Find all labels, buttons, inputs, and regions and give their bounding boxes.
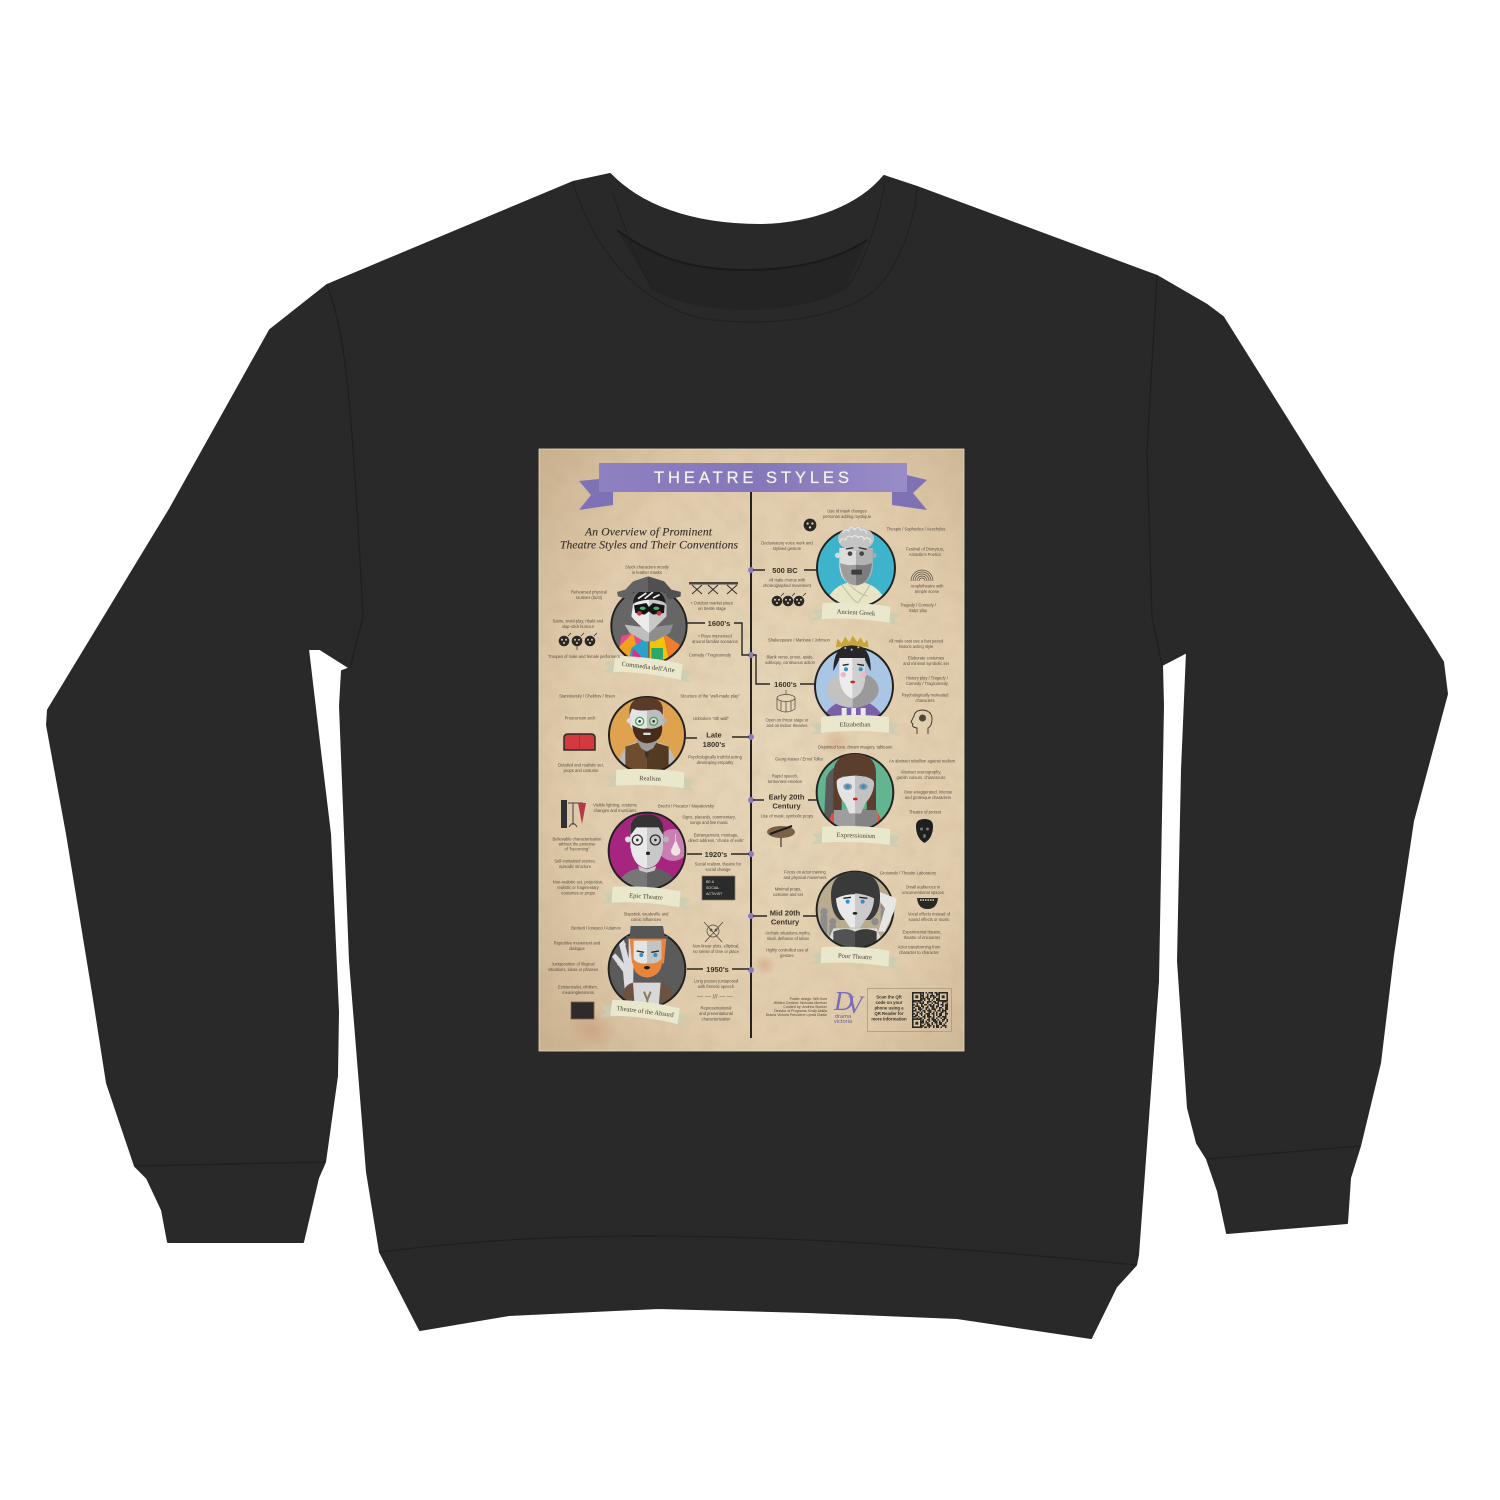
text: juxtaposition: situations, ideas or phrases bbox=[548, 967, 598, 972]
text: estrangement: direct address, 'choice of evils' bbox=[688, 838, 744, 843]
title banner: THEATRE STYLES bbox=[654, 469, 849, 487]
text: comedy: Comedy / Tragicomedy bbox=[689, 652, 732, 658]
icon: globe theatre bbox=[777, 690, 795, 712]
text: festival of dionysus: Aristotle's Poetics bbox=[909, 552, 941, 557]
text: slapstick: comic influences bbox=[631, 917, 661, 922]
connector and date: 1600's left: 1600's bbox=[708, 619, 730, 628]
text: actor transforming: character to character bbox=[899, 950, 940, 955]
icon: chalkboard: SOCIAL bbox=[706, 886, 719, 890]
text: blank verse: soliloquy, continuous action bbox=[765, 660, 816, 665]
text: non-realistic set: costumes or props bbox=[561, 890, 595, 896]
text: festival of dionysus: Festival of Dionysus, bbox=[906, 546, 944, 552]
text: elaborate costumes: Elaborate costumes bbox=[908, 656, 944, 660]
text: open thrust stage: and on indoor theatres bbox=[767, 723, 807, 728]
text: estrangement: Estrangement, montage, bbox=[694, 832, 738, 838]
ribbon: commedia dell'arte: Commedia dell'Arte bbox=[621, 661, 675, 674]
text: outdoor market: • Outdoor market place bbox=[691, 600, 734, 606]
text: over-exaggerated: and grotesque characters bbox=[905, 795, 951, 800]
text: small audiences: Small audiences in bbox=[906, 884, 941, 890]
text: tragedy: Satyr play bbox=[909, 608, 928, 613]
text: non-realistic set: Non-realistic set, projection, bbox=[553, 880, 603, 884]
logo: drama victoria: victoria bbox=[834, 1019, 853, 1025]
text: detailed set: Detailed and realistic set, bbox=[558, 762, 604, 768]
text: abstract scenography: Abstract scenography, bbox=[901, 770, 941, 774]
text: self-contained scenes: Self-contained scenes, bbox=[554, 858, 596, 864]
credits: Poster design: Will Hunt bbox=[790, 997, 827, 1001]
text: repetitive movement: dialogue bbox=[569, 946, 585, 951]
connector and date: early 20th century bbox=[753, 792, 817, 810]
panel: poor theatre bbox=[753, 870, 951, 969]
text: highly controlled gesture: Highly controlled use of bbox=[766, 948, 809, 952]
text: shakespeare: Shakespeare / Marlowe / Johnson bbox=[768, 638, 831, 642]
text: history play: Comedy / Tragicomedy bbox=[906, 681, 949, 686]
connector and date: mid 20th century: Mid 20th bbox=[770, 908, 801, 918]
text: male chorus: All male chorus with bbox=[769, 578, 806, 582]
text: signs and placards: Signs, placards, commentary, bbox=[682, 814, 736, 820]
icon: chalkboard: BE A bbox=[706, 880, 715, 884]
text: repetitive movement: Repetitive movement and bbox=[554, 940, 601, 946]
text: declamatory voice: stylised gesture bbox=[773, 546, 802, 551]
icon: mouth bbox=[917, 898, 938, 909]
text: rehearsed routines: Rehearsed physical bbox=[571, 590, 607, 594]
text: highly controlled gesture: gesture bbox=[780, 953, 795, 958]
qr code bbox=[912, 993, 948, 1027]
ribbon: realism: Realism bbox=[639, 775, 662, 783]
ribbon: commedia dell'arte bbox=[602, 653, 694, 683]
connector and date: late 1800's: Late bbox=[706, 730, 722, 740]
text: open thrust stage: Open on thrust stage or bbox=[765, 718, 809, 722]
text: rapid speech: tormented emotion bbox=[768, 779, 803, 784]
ribbon: elizabethan bbox=[810, 715, 900, 735]
text: amphitheatre: Amphitheatre with bbox=[911, 584, 944, 588]
icon: chalkboard: ACTIVIST bbox=[706, 892, 723, 896]
text: plays improvised: around familiar scenarios bbox=[692, 639, 738, 644]
text: believable characterisation: without the pretense bbox=[559, 842, 596, 846]
icon: greek mask bbox=[804, 519, 816, 531]
text: all male cast: All male cast use a fast paced bbox=[889, 638, 944, 644]
credits: Director of Programs: Emily Akkila bbox=[774, 1009, 827, 1013]
title banner bbox=[579, 463, 927, 510]
text: outdoor market: on trestle stage bbox=[698, 606, 727, 611]
text: scan the qr code: Scan the QR bbox=[876, 994, 903, 1000]
panel: elizabethan bbox=[753, 636, 950, 735]
text: satire: slap-stick humour bbox=[562, 624, 595, 629]
credits: Drama Victoria President: Lynda Clarke bbox=[766, 1013, 827, 1017]
text: satire: Satire, word-play, ribald and bbox=[553, 618, 604, 624]
text: experimental theatre: theatre of encounter bbox=[904, 935, 941, 940]
text: plays improvised: • Plays improvised bbox=[698, 634, 732, 638]
connector and date: 500 BC: 500 BC bbox=[772, 566, 798, 575]
connector and date: late 1800's bbox=[686, 730, 749, 749]
text: mask changes: Use of mask changes bbox=[827, 508, 867, 514]
text: history play: History play / Tragedy / bbox=[906, 676, 949, 680]
text: long pauses: with frenetic speech bbox=[698, 984, 735, 989]
ribbon: theatre of the absurd bbox=[599, 997, 691, 1027]
connector and date: 1600's right bbox=[753, 655, 815, 689]
text: long pauses: Long pauses juxtaposed bbox=[694, 978, 739, 984]
text: blank verse: Blank verse, prose, aside, bbox=[766, 654, 814, 660]
connector and date: 500 BC bbox=[753, 566, 817, 575]
panel: expressionism bbox=[753, 744, 956, 848]
text: stock characters: Stock characters mostly bbox=[625, 564, 670, 570]
portrait: realism bbox=[609, 697, 685, 777]
text: abstract rebellion: An abstract rebellion against realism bbox=[889, 758, 956, 764]
icon: male and female masks bbox=[559, 633, 597, 650]
text: juxtaposition: Juxtaposition of illogical bbox=[551, 962, 595, 966]
text: archaic situations: ritual, defiance of taboo bbox=[767, 936, 810, 941]
ribbon: expressionism bbox=[811, 824, 901, 848]
text: minimal props: costume and set bbox=[773, 892, 804, 897]
text: visible lighting: Visible lighting, costume bbox=[593, 802, 638, 808]
text: representational: characterisation bbox=[702, 1016, 731, 1022]
connector and date: early 20th century: Early 20th bbox=[769, 792, 805, 802]
ribbon: theatre of the absurd: Theatre of the Absurd bbox=[616, 1005, 675, 1019]
text: abstract scenography: garish colours, chiaroscuro bbox=[897, 775, 946, 780]
ribbon: ancient greek bbox=[811, 601, 901, 625]
text: believable characterisation: Believable characterisation bbox=[553, 836, 602, 842]
credits: Curated by: Andrew Stocker bbox=[783, 1005, 828, 1009]
icon: amphitheatre bbox=[911, 570, 933, 581]
text: declamatory voice: Declamatory voice work and bbox=[761, 540, 813, 546]
text: well-made play: Structure of the "well-made play" bbox=[680, 694, 740, 698]
ribbon: epic theatre bbox=[600, 884, 692, 910]
icon: proscenium curtain bbox=[564, 734, 595, 750]
text: scan the qr code: phone using a bbox=[874, 1006, 904, 1010]
text: non-linear plots: Non-linear plots, elliptical, bbox=[693, 944, 739, 948]
text: signs and placards: songs and live music bbox=[690, 820, 728, 825]
text: georg kaiser: Georg Kaiser / Ernst Toller bbox=[775, 756, 824, 762]
text: amphitheatre: temple scene bbox=[915, 589, 940, 594]
text: small audiences: unconventional spaces bbox=[902, 890, 944, 895]
text: over-exaggerated: Over-exaggerated, intense bbox=[904, 790, 953, 794]
icon: props and lighting bbox=[561, 800, 586, 828]
ribbon: epic theatre: Epic Theatre bbox=[629, 892, 663, 902]
connector and date: early 20th century: Century bbox=[772, 802, 801, 810]
text: proscenium arch: Proscenium arch bbox=[565, 716, 596, 720]
logo: drama victoria: V bbox=[847, 992, 865, 1019]
qr callout bbox=[868, 988, 952, 1032]
text: rapid speech: Rapid speech, bbox=[772, 774, 798, 778]
text: existentialist: Existentialist, nihilism, bbox=[558, 984, 598, 990]
icon: crossed mask bbox=[704, 922, 723, 942]
text: beckett: Beckett / Ionesco / Adamov bbox=[571, 926, 622, 930]
panel: epic theatre bbox=[553, 800, 749, 910]
icon: black mask bbox=[916, 819, 933, 843]
text: brecht: Brecht / Piscator / Mayakovsky bbox=[658, 804, 715, 808]
text: all male cast: historic acting style bbox=[899, 644, 934, 649]
icon: three lines: — — III — — bbox=[696, 994, 734, 1000]
text: theatre of protest: Theatre of protest bbox=[909, 810, 942, 814]
ribbon: poor theatre: Poor Theatre bbox=[838, 953, 872, 961]
subtitle: An Overview of Prominent bbox=[584, 526, 713, 538]
text: archaic situations: Archaic situations,myths, bbox=[765, 930, 811, 936]
text: grotowski: Grotowski / Theatre Laboratory bbox=[880, 870, 937, 876]
panel: theatre of the absurd bbox=[548, 912, 749, 1027]
text: social realism: social change bbox=[705, 867, 731, 872]
ribbon: realism bbox=[605, 767, 695, 791]
icon: symbolic prop bbox=[767, 826, 795, 847]
text: elaborate costumes: and minimal symbolic set bbox=[903, 661, 950, 666]
connector and date: mid 20th century: Century bbox=[771, 918, 800, 926]
icon: trestle stage bbox=[689, 582, 738, 594]
connector and date: late 1800's: 1800's bbox=[703, 740, 725, 749]
text: focus on actor training: Focus on actor training bbox=[784, 870, 827, 874]
panel: realism bbox=[558, 694, 749, 791]
text: mask changes: personas adding mystique bbox=[823, 514, 872, 519]
timeline axis bbox=[748, 492, 754, 1038]
text: vocal effects: Vocal effects instead of bbox=[908, 912, 951, 916]
logo: drama victoria: D bbox=[833, 986, 854, 1016]
panel: ancient greek bbox=[753, 508, 945, 625]
credits: Written Content: Nicholas Meehan bbox=[774, 1001, 827, 1005]
poster: theatre styles bbox=[539, 449, 964, 1051]
panel: commedia dell'arte bbox=[548, 564, 749, 683]
sweatshirt bbox=[47, 174, 1447, 1338]
text: self-contained scenes: episodic structure bbox=[559, 864, 592, 869]
text: representational: Representational bbox=[701, 1006, 732, 1010]
connector and date: 1920's: 1920's bbox=[705, 850, 727, 859]
text: rehearsed routines: routines (lazzi) bbox=[576, 595, 603, 600]
text: scan the qr code: QR Reader for bbox=[874, 1011, 904, 1016]
text: existentialist: meaninglessness bbox=[562, 990, 594, 995]
text: psychologically truthful: Psychologically truthful acting bbox=[688, 754, 743, 760]
text: use of mask: Use of mask, symbolic props bbox=[761, 814, 813, 818]
connector and date: 1920's bbox=[687, 850, 749, 859]
text: stanislavsky: Stanislavsky / Chekhov / Ibsen bbox=[559, 694, 616, 698]
icon: chalkboard bbox=[702, 876, 735, 900]
ribbon: elizabethan: Elizabethan bbox=[839, 722, 871, 728]
text: psychologically motivated: Psychologically motivated bbox=[902, 692, 949, 698]
text: tragedy: Tragedy / Comedy / bbox=[900, 602, 937, 608]
portrait: commedia bbox=[611, 576, 687, 665]
text: non-realistic set: realistic or fragmentary bbox=[557, 885, 600, 890]
text: stock characters: in leather masks bbox=[632, 570, 662, 575]
logo: drama victoria: drama bbox=[835, 1014, 852, 1020]
connector and date: 1950's bbox=[687, 965, 749, 974]
portrait: elizabethan bbox=[815, 636, 893, 725]
subtitle: Theatre Styles and Their Conventions bbox=[560, 538, 738, 552]
text: male chorus: choreographed movement bbox=[763, 583, 812, 588]
text: troupes: Troupes of male and female performers bbox=[548, 654, 620, 659]
connector and date: mid 20th century bbox=[753, 908, 817, 926]
text: thespis: Thespis / Sophocles / Aeschylus bbox=[887, 526, 945, 532]
portrait: ancient greek bbox=[817, 527, 895, 608]
text: scan the qr code: code on your bbox=[876, 1000, 903, 1005]
ribbon: ancient greek: Ancient Greek bbox=[837, 608, 876, 618]
text: experimental theatre: Experimental theatre, bbox=[903, 930, 941, 934]
text: detailed set: props and costume bbox=[564, 768, 599, 773]
text: minimal props: Minimal props, bbox=[775, 886, 801, 892]
text: fourth wall: Unbroken "4th wall" bbox=[693, 716, 729, 721]
text: focus on actor training: and physical movement bbox=[783, 875, 827, 880]
text: social realism: Social realism, theatre for bbox=[695, 862, 742, 866]
text: non-linear plots: no sense of time or place bbox=[693, 949, 740, 954]
portrait: poor theatre bbox=[817, 872, 897, 952]
text: actor transforming: Actor transforming from bbox=[898, 944, 941, 950]
connector and date: 1600's right: 1600's bbox=[774, 680, 797, 689]
logo: drama victoria bbox=[833, 986, 865, 1025]
icon: blackboard bbox=[571, 1002, 594, 1019]
text: representational: and presentational bbox=[699, 1011, 733, 1016]
text: slapstick: Slapstick, vaudeville and bbox=[624, 912, 669, 916]
portrait: epic bbox=[609, 813, 689, 893]
text: scan the qr code: more information bbox=[871, 1016, 907, 1022]
paper background bbox=[539, 449, 964, 1051]
icon: chorus masks bbox=[772, 593, 806, 606]
text: vocal effects: sound effects or music bbox=[909, 917, 949, 922]
ribbon: poor theatre bbox=[810, 945, 900, 969]
portrait: absurd bbox=[609, 926, 685, 1007]
connector and date: 1950's: 1950's bbox=[706, 965, 729, 974]
connector and date: 1600's left bbox=[687, 619, 749, 655]
text: disjointed tone: Disjointed tone, dream imagery, tableaux bbox=[818, 744, 892, 750]
icon: head with gear bbox=[911, 710, 932, 734]
text: psychologically truthful: developing empathy bbox=[697, 760, 734, 765]
portrait: expressionism bbox=[817, 754, 893, 832]
text: believable characterisation: of "becoming" bbox=[564, 846, 590, 852]
text: visible lighting: changes and musicians bbox=[594, 808, 636, 813]
ribbon: expressionism: Expressionism bbox=[836, 832, 876, 840]
text: psychologically motivated: characters bbox=[915, 698, 935, 703]
